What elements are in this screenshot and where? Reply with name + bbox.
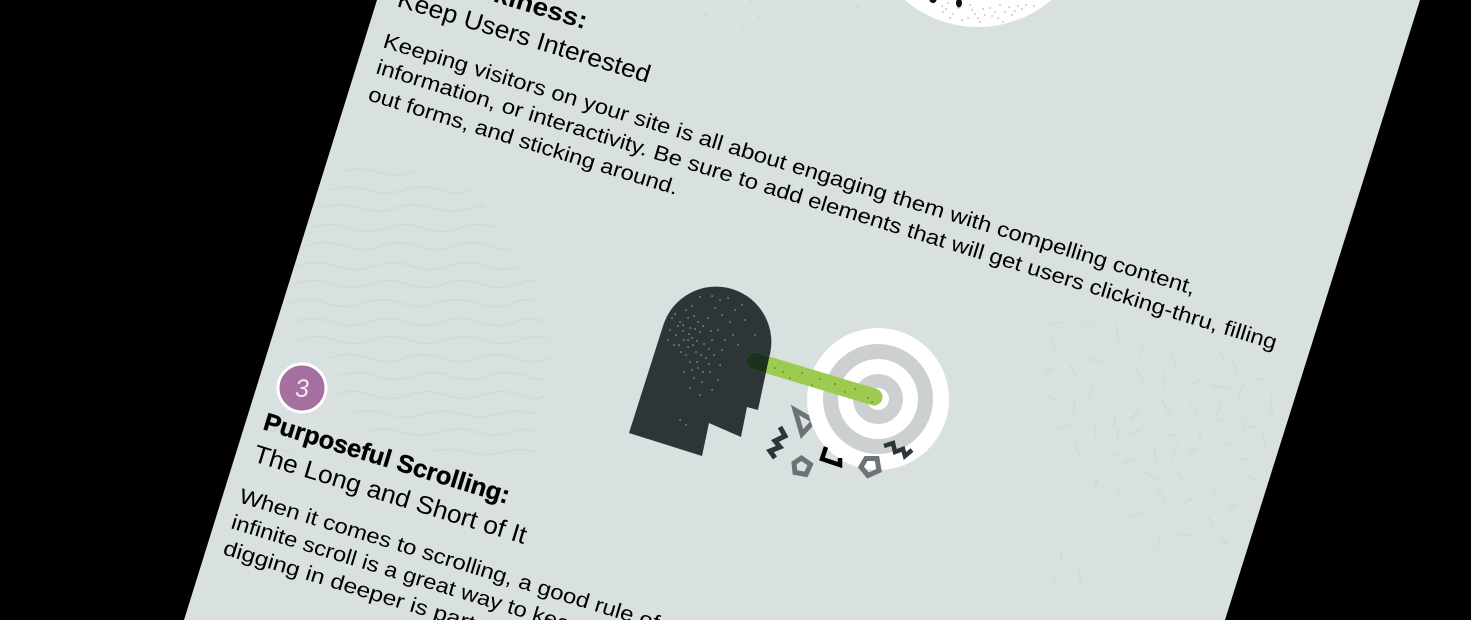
dark overlap in head <box>746 352 770 374</box>
number badge 3: 3 <box>295 375 309 403</box>
triangle outline <box>795 410 814 434</box>
texture: wave lines <box>262 169 552 454</box>
texture: scattered dashes <box>1044 322 1272 584</box>
subheading: The Long and Short of It: The Long and Short of It <box>250 440 530 550</box>
zigzag left <box>770 427 785 458</box>
head silhouette <box>629 287 771 456</box>
text block: stickiness body: out forms, and sticking around. <box>366 83 681 200</box>
text block: stickiness body: information, or interactivity. Be sure to add elements that will get users clicking-thru, filling <box>374 56 1280 354</box>
target rings <box>807 328 949 470</box>
heading: Purposeful Scrolling: Purposeful Scrolling: <box>260 408 513 510</box>
black bracket <box>822 447 840 465</box>
head speckles <box>668 296 755 425</box>
number badge 3 <box>278 364 326 412</box>
illustration: head looking at target <box>629 287 949 476</box>
icon: speckled white circle <box>865 0 1091 27</box>
text block: stickiness body: Keeping visitors on your site is all about engaging them with compelling content, <box>381 30 1198 300</box>
green sight line <box>755 361 874 397</box>
text block: scrolling body: When it comes to scrolling, a good rule of <box>237 485 662 620</box>
sight line speckles <box>775 368 872 402</box>
texture: dot patches <box>680 0 891 44</box>
pentagon left <box>794 458 810 474</box>
pentagon right <box>861 458 879 476</box>
zigzag right <box>884 443 912 456</box>
